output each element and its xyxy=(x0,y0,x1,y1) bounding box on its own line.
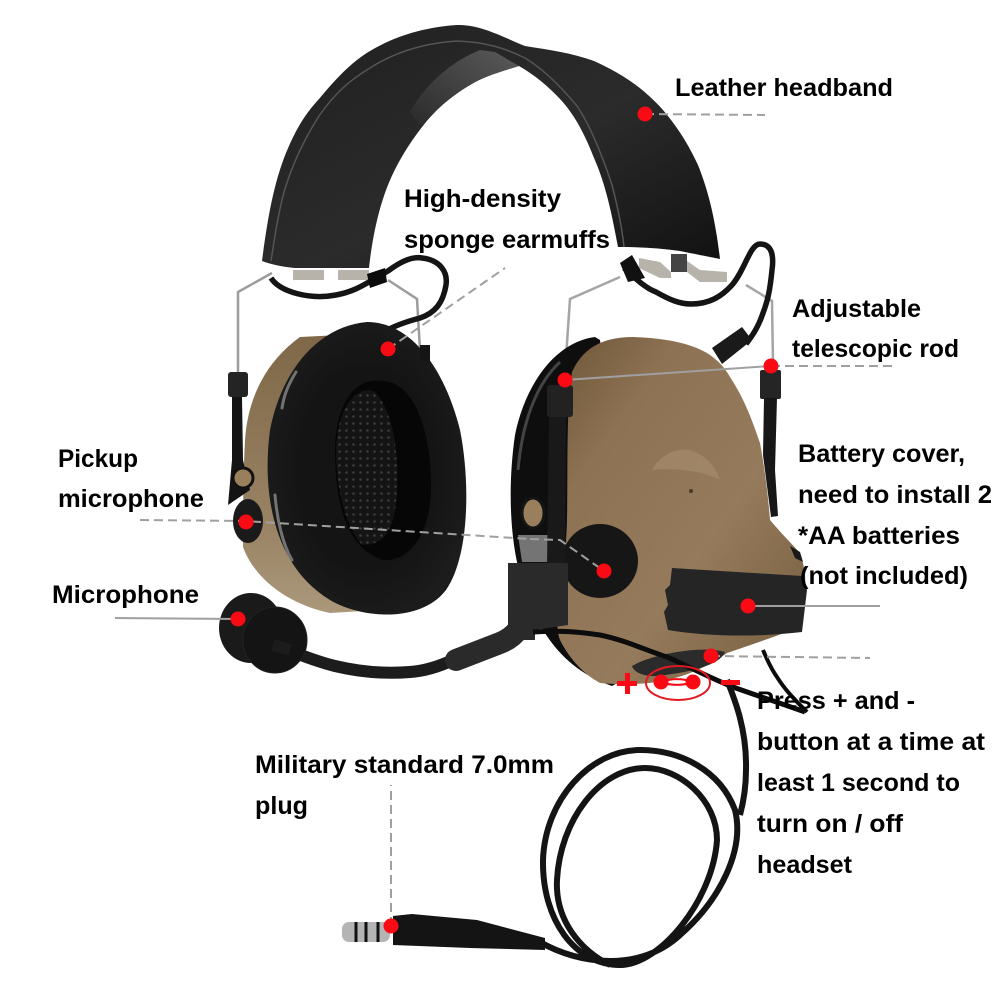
cup ridge highlight xyxy=(652,450,720,480)
label: battery cover: need to install 2 xyxy=(798,481,992,509)
label: power instructions xyxy=(757,687,986,879)
ear button recess xyxy=(632,650,725,676)
label: battery cover: *AA batteries xyxy=(798,522,960,550)
pad gloss near pivot xyxy=(518,535,548,562)
label: telescopic rod: Adjustable xyxy=(792,295,921,323)
label: leather headband: Leather headband xyxy=(675,74,893,102)
far side rod xyxy=(760,370,781,517)
coiled cable xyxy=(727,680,746,815)
label: earmuffs xyxy=(404,185,610,254)
label: plug: plug xyxy=(255,792,308,820)
label: telescopic rod: telescopic rod xyxy=(792,335,959,363)
label: battery cover xyxy=(798,440,992,590)
label: power instructions: Press + and - xyxy=(757,687,915,715)
boom microphone mount xyxy=(508,563,568,640)
label: earmuffs: High-density xyxy=(404,185,561,213)
label: power instructions: button at a time at xyxy=(757,728,986,756)
power button marks xyxy=(617,666,740,700)
label: battery cover: (not included) xyxy=(800,562,968,590)
side button nub xyxy=(790,546,803,562)
label: plug: Military standard 7.0mm xyxy=(255,751,554,779)
left pickup microphone foam xyxy=(233,499,263,543)
headset illustration xyxy=(219,25,807,965)
cup pin hole xyxy=(689,489,693,493)
label: pickup microphone: Pickup xyxy=(58,445,138,473)
left wire bracket xyxy=(238,273,420,372)
label: earmuffs: sponge earmuffs xyxy=(404,226,610,254)
battery cover xyxy=(664,568,807,636)
pad highlight xyxy=(518,362,560,470)
label: battery cover: Battery cover, xyxy=(798,440,965,468)
right wire bracket xyxy=(565,277,773,372)
right ear cup xyxy=(557,337,807,684)
speaker mesh xyxy=(336,390,397,545)
cables xyxy=(533,631,807,965)
callout leader lines xyxy=(115,114,892,926)
right headband clips and cable xyxy=(620,244,773,364)
label: power instructions: headset xyxy=(757,851,853,879)
label: power instructions: least 1 second to xyxy=(757,769,960,797)
right telescopic rod xyxy=(522,385,573,565)
label: power instructions: turn on / off xyxy=(757,810,904,838)
ear pad opening xyxy=(335,381,431,560)
right ear foam xyxy=(562,524,638,598)
label: plug xyxy=(255,751,554,820)
left microphone side sleeve xyxy=(420,345,430,361)
left telescopic rod and pivot xyxy=(228,372,253,505)
headband xyxy=(262,25,720,268)
plug xyxy=(342,914,545,950)
right ear pad xyxy=(511,337,640,686)
label: pickup microphone: microphone xyxy=(58,485,204,513)
boom arm and mic foam xyxy=(219,575,525,673)
left ear cup shell xyxy=(243,335,380,613)
left ear pad xyxy=(268,322,466,615)
left headband clips and cable xyxy=(271,258,446,332)
label: telescopic rod xyxy=(792,295,959,363)
callout dots xyxy=(230,106,778,934)
label: pickup microphone xyxy=(58,445,204,513)
label: microphone: Microphone xyxy=(52,581,199,609)
